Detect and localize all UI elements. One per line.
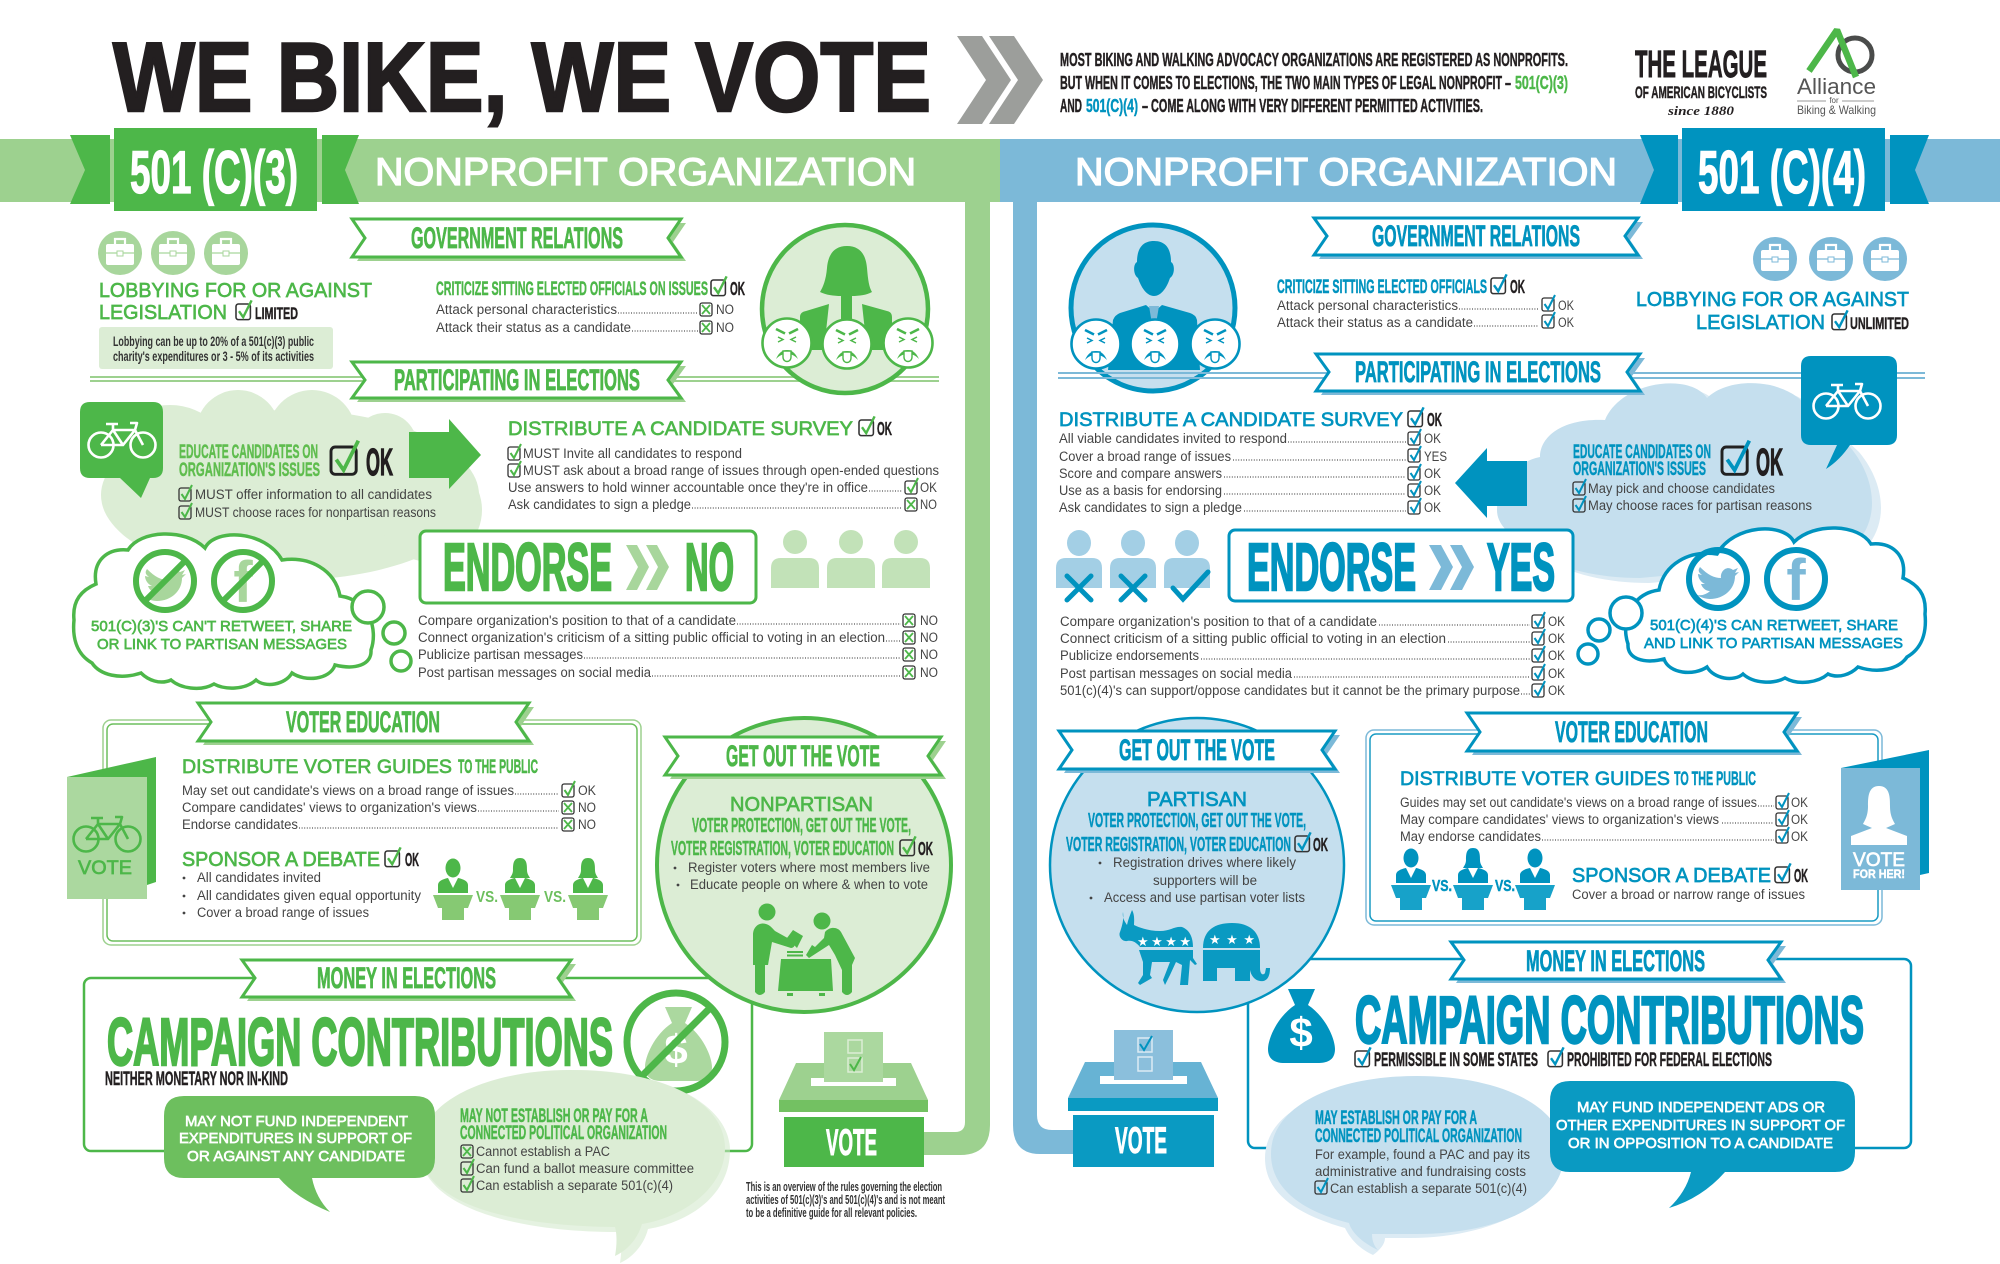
text block: distribute survey 501c4: Ask candidates to sign a pledge xyxy=(1059,500,1242,515)
callout: endorse yes: YES xyxy=(1487,530,1555,605)
heading: participating in elections 501c3: PARTICIPATING IN ELECTIONS xyxy=(394,364,640,397)
icon: double chevron arrow xyxy=(957,36,1043,124)
icon: three people blue with marks xyxy=(1056,530,1210,600)
panel: 501c3 lobbying: LIMITED xyxy=(255,304,298,323)
panel: money in elections 501c4 box: MONEY IN ELECTIONS xyxy=(1526,945,1705,978)
logo: The League of American Bicyclists xyxy=(1635,44,1767,118)
panel: get out the vote 501c4: Registration drives where likely xyxy=(1113,855,1296,870)
cloud: educate candidates 501c4 xyxy=(1497,383,1881,583)
text block: distribute survey 501c3: Use answers to hold winner accountable once they're in office xyxy=(508,480,868,495)
text block: distribute survey 501c3: MUST ask about a broad range of issues through open-ended questions xyxy=(523,463,939,478)
panel: get out the vote 501c3: GET OUT THE VOTE xyxy=(726,740,880,773)
panel: 501c4 lobbying: LEGISLATION xyxy=(1696,311,1825,334)
text block: educate candidates 501c4: May pick and choose candidates xyxy=(1588,481,1775,496)
panel: voter education 501c3: DISTRIBUTE VOTER GUIDES xyxy=(182,757,452,778)
panel: 501c3 lobbying: Lobbying can be up to 20% of a 501(c)(3) public xyxy=(113,333,314,349)
panel: money in elections 501c4 box: PERMISSIBLE IN SOME STATES xyxy=(1374,1050,1538,1071)
panel: voter education 501c3: Compare candidates' views to organization's views xyxy=(182,800,477,815)
heading: government relations 501c3 xyxy=(352,219,686,261)
speech bubble: may not establish: Can fund a ballot measure committee xyxy=(476,1161,694,1176)
text block: criticize officials 501c3: Attack their status as a candidate xyxy=(436,320,631,335)
icon: bike speech box blue xyxy=(1801,356,1897,469)
heading: participating in elections 501c3 xyxy=(352,362,686,402)
text block: distribute survey 501c4: OK xyxy=(1424,431,1441,446)
panel: blue header band: 501 (C)(4) xyxy=(1698,139,1866,206)
panel: voter education 501c3: NO xyxy=(578,817,596,832)
text block: endorse rows 501c4: Post partisan messages on social media xyxy=(1060,666,1292,681)
panel: voter education 501c4 xyxy=(1366,713,1929,925)
text block: educate candidates 501c4: May choose races for partisan reasons xyxy=(1588,498,1812,513)
text block: endorse rows 501c3 xyxy=(418,613,938,680)
speech bubble: may establish: administrative and fundraising costs xyxy=(1315,1164,1526,1179)
text block: intro: – COME ALONG WITH VERY DIFFERENT PERMITTED ACTIVITIES. xyxy=(1142,96,1483,116)
text block: distribute survey 501c3: DISTRIBUTE A CANDIDATE SURVEY xyxy=(508,419,853,440)
logo: Alliance for Biking and Walking: Biking & Walking xyxy=(1797,103,1876,117)
panel: voter education 501c4: May endorse candidates xyxy=(1400,829,1541,844)
text block: footnote: activities of 501(c)(3)'s and 501(c)(4)'s and is not meant xyxy=(746,1193,946,1207)
panel: 501c3 lobbying: LEGISLATION xyxy=(99,301,227,324)
text block: distribute survey 501c3: OK xyxy=(877,419,892,439)
heading: government relations 501c4 xyxy=(1314,218,1643,259)
panel: voter education 501c3: OK xyxy=(405,850,419,870)
panel: green header band: NONPROFIT ORGANIZATION xyxy=(375,151,916,194)
text block: criticize officials 501c4: OK xyxy=(1510,277,1525,297)
text block: intro: 501(C)(3) xyxy=(1515,73,1568,93)
panel: get out the vote 501c3: OK xyxy=(918,839,933,859)
text block: endorse rows 501c4: Publicize endorsements xyxy=(1060,648,1199,663)
panel: voter education 501c4: Cover a broad or narrow range of issues xyxy=(1572,887,1805,902)
speech bubble: may establish xyxy=(1265,1076,1564,1255)
speech bubble: may establish: CONNECTED POLITICAL ORGANIZATION xyxy=(1315,1126,1522,1147)
text block: endorse rows 501c4: OK xyxy=(1548,683,1565,698)
text block: endorse rows 501c3: NO xyxy=(920,665,938,680)
panel: 501c3 lobbying: charity's expenditures or 3 - 5% of its activities xyxy=(113,348,314,364)
thought cloud: cannot retweet: OR LINK TO PARTISAN MESSAGES xyxy=(97,636,347,653)
panel: get out the vote 501c4: Access and use partisan voter lists xyxy=(1104,890,1305,905)
icon: donkey: ★★★★ xyxy=(1137,935,1191,950)
panel: money in elections 501c4 box: PROHIBITED FOR FEDERAL ELECTIONS xyxy=(1567,1050,1772,1071)
panel: 501c4 lobbying: UNLIMITED xyxy=(1850,314,1909,333)
thought cloud: cannot retweet xyxy=(74,534,411,688)
panel: 501c3 lobbying: LOBBYING FOR OR AGAINST xyxy=(99,279,372,302)
divider lines left xyxy=(90,377,939,381)
panel: voter education 501c4: OK xyxy=(1791,795,1808,810)
panel: voter education 501c4: VOTE xyxy=(1853,850,1905,871)
panel: get out the vote 501c3: VOTER PROTECTION, GET OUT THE VOTE, xyxy=(692,815,911,837)
heading: government relations 501c4: GOVERNMENT RELATIONS xyxy=(1372,220,1580,253)
speech bubble: may establish: Can establish a separate 501(c)(4) xyxy=(1330,1181,1527,1196)
text block: endorse rows 501c4: OK xyxy=(1548,614,1565,629)
panel: voter education 501c4: TO THE PUBLIC xyxy=(1674,769,1756,790)
panel: voter education 501c3: TO THE PUBLIC xyxy=(458,757,538,778)
icon: ballot box green: VOTE xyxy=(826,1122,877,1163)
panel: get out the vote 501c4: VOTER PROTECTION, GET OUT THE VOTE, xyxy=(1088,810,1306,832)
text block: footnote: This is an overview of the rules governing the election xyxy=(746,1180,942,1194)
cloud: educate candidates 501c3: ORGANIZATION'S ISSUES xyxy=(179,460,320,481)
speech bubble: may fund: OR IN OPPOSITION TO A CANDIDATE xyxy=(1568,1135,1833,1152)
icon: elephant xyxy=(1203,923,1270,981)
speech bubble: may establish: For example, found a PAC and pay its xyxy=(1315,1147,1530,1162)
text block: endorse rows 501c3: Connect organization's criticism of a sitting public official to voting in an election xyxy=(418,630,885,645)
text block: criticize officials 501c3: OK xyxy=(730,279,745,299)
text block: criticize officials 501c4: OK xyxy=(1558,315,1574,330)
text block: criticize officials 501c3: CRITICIZE SITTING ELECTED OFFICIALS ON ISSUES xyxy=(436,279,708,300)
thought cloud: can retweet: 501(C)(4)'S CAN RETWEET, SHARE xyxy=(1650,617,1898,634)
text block: distribute survey 501c4: Score and compare answers xyxy=(1059,466,1222,481)
logo: Alliance for Biking and Walking: for xyxy=(1829,96,1839,105)
text block: distribute survey 501c3: NO xyxy=(920,497,937,512)
panel: voter education 501c3: All candidates invited xyxy=(197,870,321,885)
text block: distribute survey 501c3: OK xyxy=(920,480,937,495)
speech bubble: may not fund xyxy=(164,1096,435,1212)
text block: distribute survey 501c4: DISTRIBUTE A CANDIDATE SURVEY xyxy=(1059,410,1403,431)
text block: criticize officials 501c4: Attack personal characteristics xyxy=(1277,298,1458,313)
text block: footnote xyxy=(746,1180,946,1220)
logo: The League of American Bicyclists: THE LEAGUE xyxy=(1635,44,1767,86)
speech bubble: may not establish: CONNECTED POLITICAL ORGANIZATION xyxy=(460,1123,667,1144)
text block: distribute survey 501c4: OK xyxy=(1427,410,1442,430)
speech bubble: may not fund: MAY NOT FUND INDEPENDENT xyxy=(185,1113,408,1130)
panel: voter education 501c4: OK xyxy=(1791,812,1808,827)
text block: criticize officials 501c3 xyxy=(436,276,745,335)
speech bubble: may not fund: EXPENDITURES IN SUPPORT OF xyxy=(179,1130,412,1147)
text block: endorse rows 501c4: OK xyxy=(1548,666,1565,681)
text block: educate candidates 501c4: OK xyxy=(1756,442,1783,484)
panel: blue header band: NONPROFIT ORGANIZATION xyxy=(1075,151,1617,194)
panel: voter education 501c3: VS. xyxy=(476,889,498,906)
panel: voter education 501c4: FOR HER! xyxy=(1853,867,1905,881)
text block: intro: 501(C)(4) xyxy=(1086,96,1138,116)
panel: 501c4 lobbying: LOBBYING FOR OR AGAINST xyxy=(1636,288,1909,311)
panel: voter education 501c4: DISTRIBUTE VOTER GUIDES xyxy=(1400,769,1670,790)
speech bubble: may fund: MAY FUND INDEPENDENT ADS OR xyxy=(1577,1099,1825,1116)
text block: endorse rows 501c3: NO xyxy=(920,613,938,628)
panel: 501c4 lobbying xyxy=(1636,237,1909,334)
text block: endorse rows 501c3: Publicize partisan messages xyxy=(418,647,583,662)
speech bubble: may not fund: OR AGAINST ANY CANDIDATE xyxy=(187,1148,405,1165)
speech bubble: may establish: MAY ESTABLISH OR PAY FOR A xyxy=(1315,1108,1477,1129)
icon: woman with angry faces xyxy=(762,225,932,393)
icon: ballot box green xyxy=(779,1032,928,1167)
thought cloud: cannot retweet: 501(C)(3)'S CAN'T RETWEET, SHARE xyxy=(91,618,352,635)
text block: intro xyxy=(1060,50,1568,116)
panel: voter education 501c3: VOTE xyxy=(78,858,132,879)
text block: endorse rows 501c4: 501(c)(4)'s can support/oppose candidates but it cannot be the primary purpose xyxy=(1060,683,1520,698)
panel: voter education 501c3 xyxy=(67,703,641,945)
panel: voter education 501c3: All candidates given equal opportunity xyxy=(197,888,421,903)
logo: The League of American Bicyclists: since 1880 xyxy=(1667,103,1735,118)
text block: endorse rows 501c4: OK xyxy=(1548,631,1565,646)
logo: Alliance for Biking and Walking xyxy=(1797,30,1876,117)
text block: endorse rows 501c4: Connect criticism of a sitting public official to voting in an election xyxy=(1060,631,1446,646)
text block: distribute survey 501c4 xyxy=(1059,407,1447,515)
panel: money in elections 501c3 box xyxy=(84,960,752,1151)
text block: endorse rows 501c4: OK xyxy=(1548,648,1565,663)
panel: money in elections 501c3 box: NEITHER MONETARY NOR IN-KIND xyxy=(105,1069,288,1090)
panel: voter education 501c3: SPONSOR A DEBATE xyxy=(182,849,380,871)
text block: distribute survey 501c4: Cover a broad range of issues xyxy=(1059,449,1231,464)
panel: voter education 501c3: Endorse candidates xyxy=(182,817,298,832)
text block: criticize officials 501c3: NO xyxy=(716,320,734,335)
panel: voter education 501c4: VOTER EDUCATION xyxy=(1555,716,1708,749)
text block: criticize officials 501c3: Attack personal characteristics xyxy=(436,302,617,317)
text block: distribute survey 501c4: Use as a basis for endorsing xyxy=(1059,483,1222,498)
text block: endorse rows 501c4: Compare organization's position to that of a candidate xyxy=(1060,614,1377,629)
icon: money bag xyxy=(1268,989,1335,1063)
panel: voter education 501c3: OK xyxy=(578,783,596,798)
panel: 501c3 lobbying xyxy=(98,231,372,369)
panel: get out the vote 501c3: VOTER REGISTRATION, VOTER EDUCATION xyxy=(671,838,894,860)
panel: voter education 501c4: VS. xyxy=(1495,878,1515,895)
icon: man with angry faces xyxy=(1071,225,1240,391)
text block: endorse rows 501c3: Compare organization's position to that of a candidate xyxy=(418,613,736,628)
text block: endorse rows 501c3: Post partisan messages on social media xyxy=(418,665,651,680)
panel: money in elections 501c3 box: CAMPAIGN CONTRIBUTIONS xyxy=(107,1005,613,1080)
speech bubble: may not establish: Can establish a separate 501(c)(4) xyxy=(476,1178,673,1193)
panel: get out the vote 501c3: NONPARTISAN xyxy=(730,794,873,816)
thought cloud: can retweet: f xyxy=(1786,548,1806,613)
cloud: educate candidates 501c3: MUST choose races for nonpartisan reasons xyxy=(195,505,436,520)
callout: endorse yes: ENDORSE xyxy=(1247,530,1416,605)
heading: participating in elections 501c4: PARTICIPATING IN ELECTIONS xyxy=(1355,356,1601,389)
icon: ballot box blue: VOTE xyxy=(1115,1120,1167,1161)
panel: money in elections 501c3 box: MONEY IN ELECTIONS xyxy=(317,962,496,995)
panel: blue header band xyxy=(1000,128,2000,1154)
text block: criticize officials 501c4: OK xyxy=(1558,298,1574,313)
panel: voter education 501c4: SPONSOR A DEBATE xyxy=(1572,865,1771,887)
text block: educate candidates 501c4: ORGANIZATION'S ISSUES xyxy=(1573,459,1706,480)
panel: green header band xyxy=(0,128,1000,1155)
text block: endorse rows 501c4 xyxy=(1060,612,1565,698)
panel: get out the vote 501c4: supporters will be xyxy=(1153,873,1257,888)
panel: voter education 501c4: OK xyxy=(1794,866,1808,886)
cloud: educate candidates 501c3 xyxy=(80,390,482,580)
text block: intro: BUT WHEN IT COMES TO ELECTIONS, THE TWO MAIN TYPES OF LEGAL NONPROFIT – xyxy=(1060,73,1511,93)
panel: get out the vote 501c4: PARTISAN xyxy=(1147,789,1247,811)
panel: voter education 501c4: OK xyxy=(1791,829,1808,844)
text block: criticize officials 501c3: NO xyxy=(716,302,734,317)
text block: distribute survey 501c3: MUST Invite all candidates to respond xyxy=(523,446,742,461)
title: WE BIKE, WE VOTE xyxy=(113,22,931,132)
text block: educate candidates 501c4: EDUCATE CANDIDATES ON xyxy=(1573,442,1711,463)
panel: get out the vote 501c3: Educate people on where & when to vote xyxy=(690,877,928,892)
text block: endorse rows 501c3: NO xyxy=(920,647,938,662)
callout: endorse no: NO xyxy=(685,530,734,605)
thought cloud: can retweet xyxy=(1578,528,1925,682)
text block: footnote: to be a definitive guide for all relevant policies. xyxy=(746,1206,917,1220)
logo: The League of American Bicyclists: OF AMERICAN BICYCLISTS xyxy=(1635,83,1767,102)
arrow: right green xyxy=(409,419,481,489)
cloud: educate candidates 501c3: MUST offer information to all candidates xyxy=(195,487,432,502)
divider lines right xyxy=(1058,373,1925,378)
panel: get out the vote 501c4 xyxy=(1050,718,1344,1012)
speech bubble: may fund xyxy=(1550,1081,1855,1208)
text block: endorse rows 501c3: NO xyxy=(920,630,938,645)
icon: no money bag: $ xyxy=(664,1026,688,1073)
heading: government relations 501c3: GOVERNMENT RELATIONS xyxy=(411,222,623,255)
panel: get out the vote 501c4: OK xyxy=(1313,835,1328,855)
heading: participating in elections 501c4 xyxy=(1316,354,1645,395)
speech bubble: may not establish: Cannot establish a PAC xyxy=(476,1144,610,1159)
speech bubble: may fund: OTHER EXPENDITURES IN SUPPORT OF xyxy=(1556,1117,1845,1134)
text block: distribute survey 501c4: OK xyxy=(1424,483,1441,498)
panel: voter education 501c3: VS. xyxy=(544,889,566,906)
icon: no money bag xyxy=(627,993,725,1091)
text block: intro: AND xyxy=(1060,96,1082,116)
text block: distribute survey 501c4: OK xyxy=(1424,500,1441,515)
panel: voter education 501c3: VOTER EDUCATION xyxy=(286,706,440,739)
text block: distribute survey 501c4: YES xyxy=(1424,449,1447,464)
icon: elephant: ★★★ xyxy=(1209,933,1255,948)
icon: three people green xyxy=(771,530,930,588)
text block: distribute survey 501c3 xyxy=(508,416,939,512)
text block: distribute survey 501c4: OK xyxy=(1424,466,1441,481)
text block: educate candidates 501c4 xyxy=(1573,441,1812,513)
cloud: educate candidates 501c3: OK xyxy=(366,442,393,484)
panel: voter education 501c3: NO xyxy=(578,800,596,815)
panel: voter education 501c4: May compare candidates' views to organization's views xyxy=(1400,812,1719,827)
text block: criticize officials 501c4: Attack their status as a candidate xyxy=(1277,315,1473,330)
panel: voter education 501c4: Guides may set out candidate's views on a broad range of issues xyxy=(1400,795,1757,810)
panel: voter education 501c4: VS. xyxy=(1432,878,1452,895)
panel: green header band: 501 (C)(3) xyxy=(130,139,298,206)
icon: ballot box blue xyxy=(1068,1030,1218,1167)
arrow: left blue xyxy=(1455,448,1527,518)
icon: donkey xyxy=(1119,910,1197,985)
speech bubble: may not establish: MAY NOT ESTABLISH OR PAY FOR A xyxy=(460,1106,648,1127)
icon: money bag: $ xyxy=(1289,1009,1313,1056)
icon: people voting xyxy=(753,904,855,996)
text block: distribute survey 501c3: Ask candidates to sign a pledge xyxy=(508,497,691,512)
text block: criticize officials 501c4: CRITICIZE SITTING ELECTED OFFICIALS xyxy=(1277,277,1487,298)
text block: distribute survey 501c4: All viable candidates invited to respond xyxy=(1059,431,1287,446)
cloud: educate candidates 501c3: EDUCATE CANDIDATES ON xyxy=(179,442,318,463)
callout: endorse no: ENDORSE xyxy=(443,530,612,605)
panel: get out the vote 501c4: GET OUT THE VOTE xyxy=(1119,734,1275,767)
panel: get out the vote 501c3: Register voters where most members live xyxy=(688,860,930,875)
panel: get out the vote 501c3 xyxy=(657,718,951,1012)
panel: get out the vote 501c4: VOTER REGISTRATION, VOTER EDUCATION xyxy=(1066,834,1291,856)
speech bubble: may not establish xyxy=(420,1070,730,1263)
logo: Alliance for Biking and Walking: Alliance xyxy=(1797,74,1876,99)
text block: intro: MOST BIKING AND WALKING ADVOCACY ORGANIZATIONS ARE REGISTERED AS NONPROFITS. xyxy=(1060,50,1568,70)
panel: money in elections 501c4 box xyxy=(1248,942,1911,1148)
thought cloud: can retweet: AND LINK TO PARTISAN MESSAGES xyxy=(1644,635,1903,652)
panel: voter education 501c3: Cover a broad range of issues xyxy=(197,905,369,920)
text block: criticize officials 501c4 xyxy=(1277,274,1574,330)
thought cloud: cannot retweet: f xyxy=(233,550,253,615)
panel: voter education 501c3: May set out candidate's views on a broad range of issues xyxy=(182,783,514,798)
